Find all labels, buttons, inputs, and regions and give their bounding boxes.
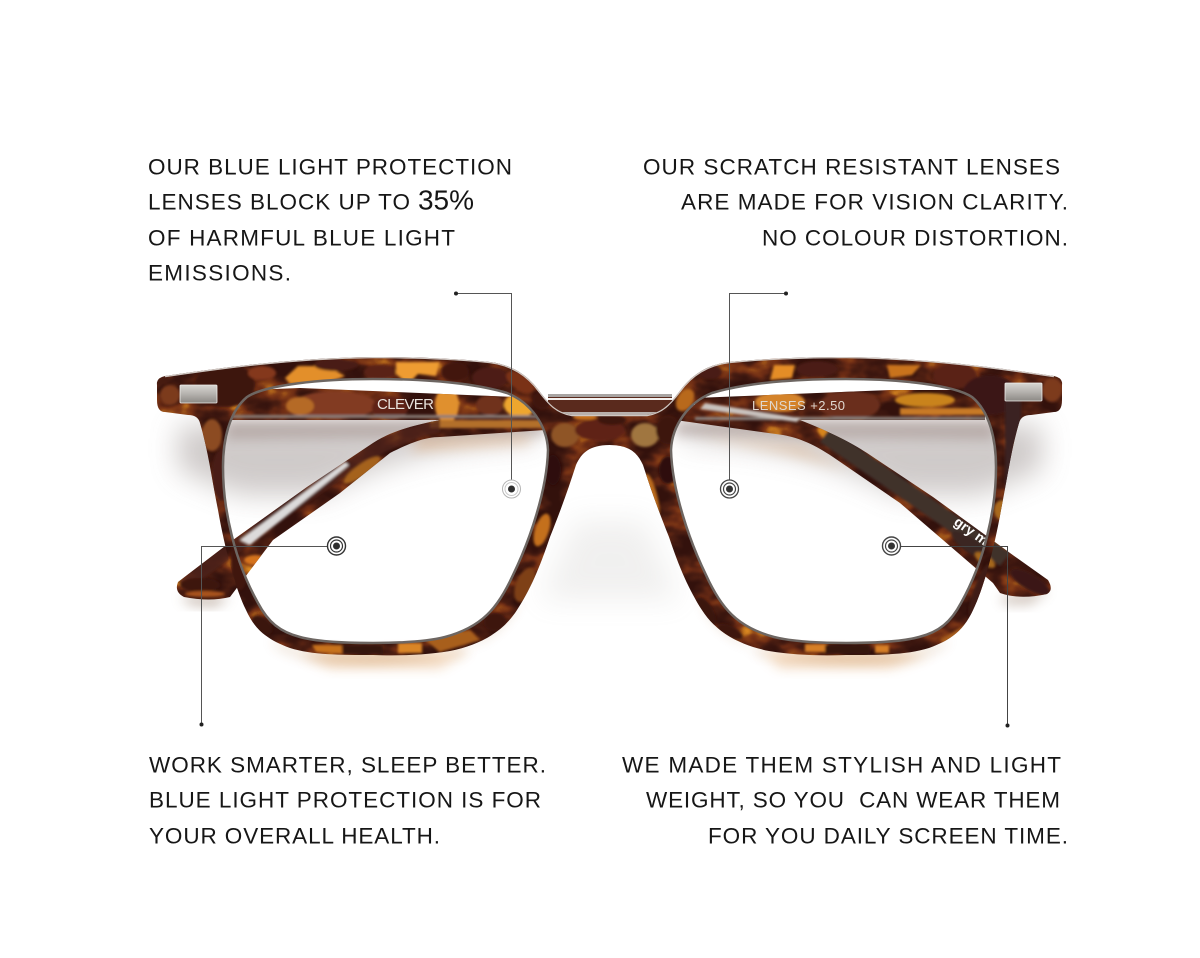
text block: work smarter: BLUE LIGHT PROTECTION IS FOR — [149, 788, 541, 812]
text block: stylish and light: FOR YOU DAILY SCREEN TIME. — [708, 824, 1068, 848]
frame front — [150, 350, 1070, 660]
callout end dots — [200, 292, 1010, 728]
lens rim: right — [671, 379, 996, 643]
temple logo: gry m — [951, 513, 992, 548]
text block: stylish and light: WEIGHT, SO YOU CAN WEAR THEM — [646, 788, 1060, 812]
temple text: right: LENSES +2.50 — [752, 398, 845, 413]
hinge rivet: left — [180, 385, 217, 403]
text block: blue light protection: LENSES BLOCK UP TO — [148, 190, 410, 214]
lens rim: left — [223, 379, 548, 643]
bridge back piece — [548, 394, 672, 418]
marker: lower right lens — [882, 537, 900, 555]
text block: stylish and light — [622, 752, 1068, 848]
text block: scratch resistant: ARE MADE FOR VISION CLARITY. — [681, 190, 1068, 214]
marker: top right lens — [720, 480, 738, 498]
text block: work smarter — [149, 752, 546, 848]
text block: work smarter: YOUR OVERALL HEALTH. — [149, 824, 440, 848]
text block: work smarter: WORK SMARTER, SLEEP BETTER. — [149, 752, 546, 778]
highlight along upper frame edge — [165, 357, 1054, 415]
text block: blue light protection: 35% — [418, 184, 474, 216]
text block: blue light protection: OUR BLUE LIGHT PROTECTION — [148, 154, 512, 180]
text block: blue light protection — [148, 154, 512, 286]
temple arms — [170, 380, 1060, 605]
glasses shadow — [178, 420, 1050, 668]
text block: blue light protection: OF HARMFUL BLUE LIGHT — [148, 226, 455, 250]
text block: scratch resistant — [643, 154, 1068, 250]
marker: lower left lens — [328, 537, 346, 555]
callout lines — [202, 294, 1008, 725]
text block: blue light protection: EMISSIONS. — [148, 260, 291, 286]
hinge rivet: right — [1005, 383, 1042, 401]
text block: scratch resistant: NO COLOUR DISTORTION. — [762, 226, 1068, 250]
marker: top left lens — [502, 480, 520, 498]
text block: scratch resistant: OUR SCRATCH RESISTANT LENSES — [643, 154, 1060, 180]
temple text: left: CLEVER — [377, 396, 434, 413]
text block: stylish and light: WE MADE THEM STYLISH AND LIGHT — [622, 752, 1061, 778]
